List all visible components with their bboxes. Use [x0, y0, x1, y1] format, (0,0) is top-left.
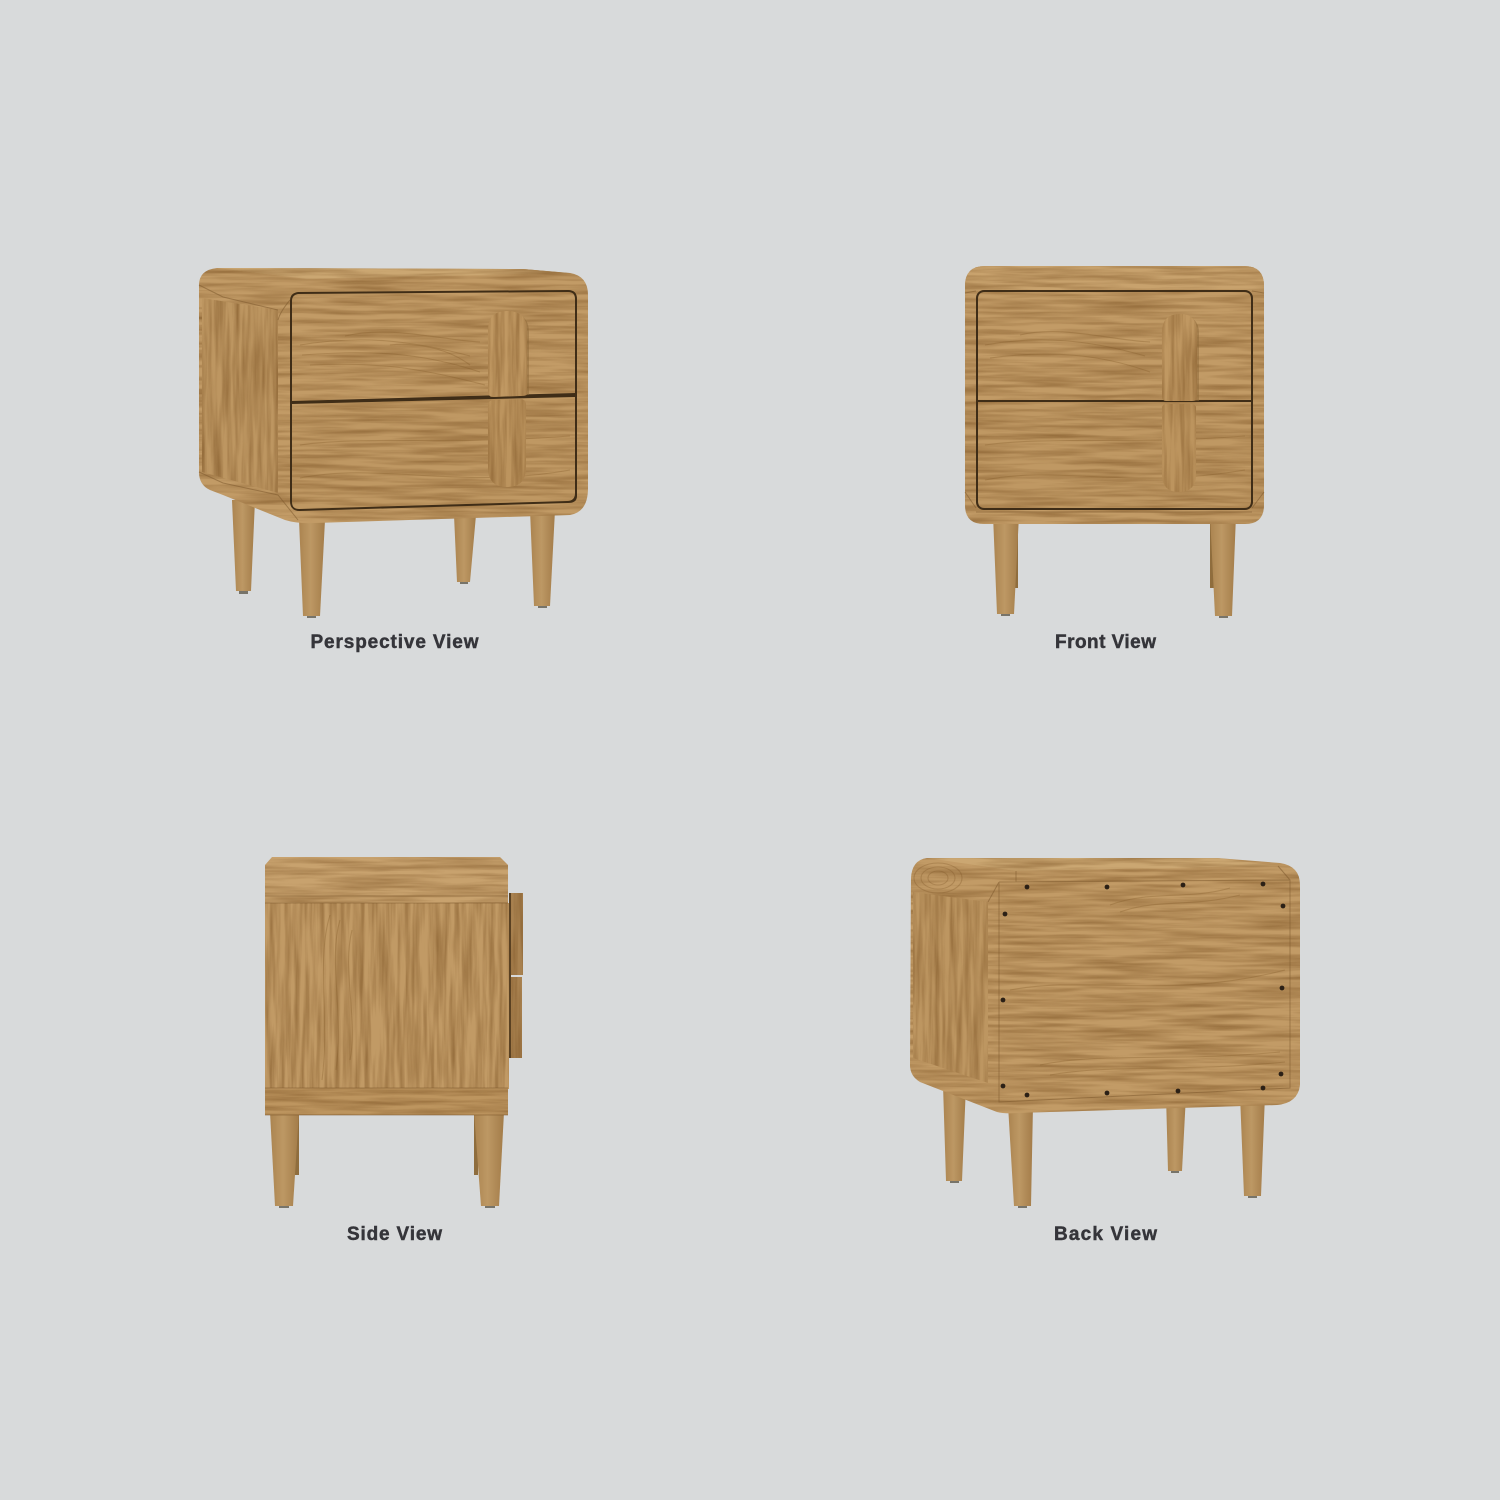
- top surface: [217, 268, 567, 279]
- panel: front view: [965, 266, 1264, 618]
- bottom rail: [265, 1088, 508, 1115]
- drawers: [976, 290, 1253, 510]
- cabinet body: [199, 268, 588, 523]
- panel: perspective view: [199, 268, 588, 618]
- legs: [993, 515, 1236, 618]
- legs: [270, 1112, 504, 1208]
- top rail: [265, 857, 508, 903]
- cabinet body: [910, 858, 1300, 1113]
- cabinet body: [965, 266, 1264, 524]
- screws: [1001, 882, 1285, 1097]
- drawer handle: [1162, 314, 1199, 492]
- label: perspective view: Perspective View: [310, 632, 479, 653]
- label: front view: Front View: [1055, 632, 1156, 653]
- drawers: [290, 290, 577, 511]
- cabinet body: [265, 903, 509, 1089]
- label: back view: Back View: [1054, 1224, 1157, 1245]
- panel: back view: [910, 858, 1300, 1208]
- top surface: [927, 858, 1278, 871]
- left side panel: [913, 892, 988, 1083]
- drawer fronts: [509, 893, 523, 1058]
- legs: [232, 500, 555, 618]
- left side panel: [202, 298, 278, 493]
- back panel: [988, 866, 1290, 1102]
- top rail: [965, 266, 1264, 291]
- panel: side view: [265, 857, 523, 1208]
- drawer handle: [488, 311, 529, 487]
- legs: [943, 1085, 1265, 1208]
- label: side view: Side View: [347, 1224, 442, 1245]
- corner log end grain: [914, 863, 962, 893]
